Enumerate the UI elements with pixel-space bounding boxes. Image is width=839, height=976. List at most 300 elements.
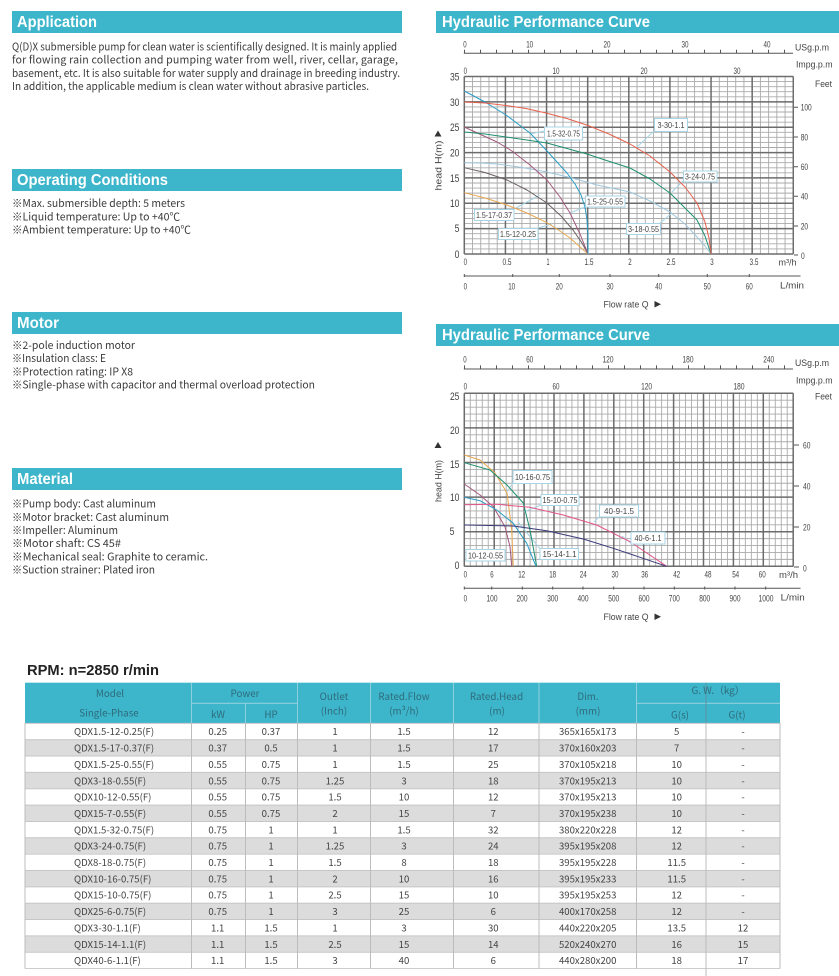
- table rows: 25: [488, 757, 499, 771]
- table rows: QDX10-12-0.55(F): [74, 790, 151, 804]
- panel: application: [12, 11, 402, 94]
- table rows: 15: [399, 937, 409, 951]
- table rows: QDX1.5-12-0.25(F): [74, 724, 154, 738]
- text block: application description: [12, 39, 400, 94]
- right axis: feet: 0: [801, 251, 805, 261]
- table rows: QDX15-10-0.75(F): [74, 888, 151, 902]
- table body stripes and lines: [25, 723, 780, 976]
- table rows: 0.5: [264, 741, 278, 755]
- text block: material list: [12, 497, 208, 578]
- x axis: m3/h: 3.5: [750, 257, 758, 267]
- heading: hydraulic performance curve 2: Hydraulic Performance Curve: [442, 327, 650, 344]
- table rows: 17: [488, 741, 499, 755]
- table rows: 13.5: [667, 920, 686, 934]
- table rows: 370x195x213: [559, 773, 616, 787]
- top axis: USg.p.m: 180: [682, 354, 694, 364]
- table rows: -: [741, 757, 745, 771]
- x axis: m3/h: 48: [704, 569, 712, 579]
- table rows: 2.5: [328, 937, 342, 951]
- leader lines: [514, 131, 683, 228]
- y axis: head in metres: 15: [450, 459, 459, 471]
- heading: material: [12, 468, 402, 490]
- curve labels: 1.5-25-0.55: [587, 196, 623, 206]
- table rows: 18: [488, 773, 499, 787]
- y axis: head in metres: [450, 72, 459, 261]
- table rows: 32: [488, 822, 499, 836]
- table rows: 370x195x213: [559, 790, 616, 804]
- curve labels: [466, 470, 665, 561]
- table rows: 8: [401, 855, 407, 869]
- right axis: feet: 80: [801, 132, 808, 142]
- x axis: L/min: L/min: [780, 280, 804, 290]
- x axis: m3/h: 1.5: [584, 257, 594, 267]
- curve: 1.5-17-0.37: [464, 168, 588, 254]
- curve: 40-6-1.1: [464, 525, 667, 566]
- table rows: 12: [671, 888, 682, 902]
- x axis: m3/h: m³/h: [778, 258, 796, 268]
- table rows: 1.1: [211, 937, 224, 951]
- text block: application description: Q(D)X submersible pump for clean water is scientifically designed. It is mainly applied: [12, 39, 397, 54]
- x axis: L/min: 400: [578, 594, 588, 604]
- heading: operating conditions: Operating Conditions: [17, 172, 168, 189]
- table header: (Inch): [321, 704, 347, 718]
- x axis: L/min: 20: [556, 281, 563, 291]
- table rows: 6: [491, 904, 496, 918]
- y axis: head in metres: [450, 391, 459, 572]
- x axis: m3/h: [464, 569, 798, 580]
- table rows: 0.75: [208, 855, 227, 869]
- curve: 15-10-0.75: [464, 497, 536, 566]
- table rows: 1.5: [397, 757, 411, 771]
- table rows: 3: [332, 953, 338, 967]
- table rows: 10: [488, 888, 499, 902]
- x axis: m3/h: 0: [464, 257, 467, 267]
- top axis: Impg.p.m labels: 0: [464, 66, 467, 76]
- table rows: QDX3-30-1.1(F): [74, 920, 141, 934]
- right axis: feet: 40: [801, 192, 808, 202]
- y axis: head in metres: 0: [455, 560, 459, 572]
- table rows: QDX1.5-17-0.37(F): [74, 741, 154, 755]
- y axis: head in metres: 25: [450, 122, 459, 134]
- curve: 10-16-0.75: [464, 455, 513, 566]
- table rows: 16: [671, 937, 682, 951]
- table rows: -: [741, 839, 745, 853]
- table rows: QDX25-6-0.75(F): [74, 904, 146, 918]
- top axis: USg.p.m: 240: [763, 354, 774, 364]
- top axis: USg.p.m: [463, 354, 793, 369]
- table rows: -: [741, 888, 745, 902]
- table rows: 1.5: [264, 953, 278, 967]
- table rows: 0.75: [208, 822, 227, 836]
- table rows: 1.5: [328, 855, 342, 869]
- top axis: Impg.p.m labels: [464, 381, 744, 391]
- table rows: QDX3-18-0.55(F): [74, 773, 146, 787]
- text block: application description: In addition, the applicable medium is clean water without abrasive particles.: [12, 79, 369, 94]
- top axis: USg.p.m: 0: [463, 39, 467, 49]
- table rows: 1: [268, 822, 274, 836]
- x axis: m3/h: 24: [580, 569, 587, 579]
- x axis: L/min: 200: [516, 594, 528, 604]
- table rows: 0.55: [208, 757, 227, 771]
- chart: performance curve 1: [434, 39, 833, 310]
- text block: material list: ※Motor shaft: CS 45#: [12, 536, 121, 551]
- unit labels: USg.p.m: [795, 42, 829, 52]
- x axis: L/min: [464, 586, 805, 604]
- table rows: 3: [401, 839, 407, 853]
- heading: hydraulic performance curve 1: Hydraulic Performance Curve: [442, 14, 650, 31]
- table rows: 11.5: [667, 855, 686, 869]
- x axis: L/min: 1000: [758, 594, 774, 604]
- y axis title: head H(m): [434, 141, 444, 190]
- top axis: USg.p.m: 60: [526, 354, 533, 364]
- right axis: feet: 20: [801, 221, 808, 231]
- table rows: -: [741, 904, 745, 918]
- x axis title: flow rate: Flow rate Q: [604, 612, 648, 622]
- table rows: QDX1.5-25-0.55(F): [74, 757, 154, 771]
- table rows: 10: [399, 790, 409, 804]
- table rows: 1: [332, 757, 338, 771]
- table rows: QDX15-14-1.1(F): [74, 937, 146, 951]
- top axis: Impg.p.m labels: [464, 66, 740, 76]
- top axis: Impg.p.m labels: 10: [552, 66, 560, 76]
- table rows: 395x195x233: [559, 871, 616, 885]
- text block: motor list: ※Insulation class: E: [12, 351, 106, 366]
- table rows: 0.55: [208, 790, 227, 804]
- table rows: 440x220x205: [559, 920, 616, 934]
- right axis: feet: [794, 102, 812, 261]
- table rows: 395x195x228: [559, 855, 616, 869]
- y axis: head in metres: 30: [450, 97, 459, 109]
- table rows: 365x165x173: [559, 724, 616, 738]
- unit labels: Feet: [815, 79, 832, 89]
- table rows: 1: [268, 855, 274, 869]
- right axis: feet: 20: [803, 522, 810, 532]
- unit labels: Feet: [815, 392, 832, 402]
- table rows: 10: [671, 773, 682, 787]
- table rows: 1.5: [397, 741, 411, 755]
- table rows: QDX40-6-1.1(F): [74, 953, 141, 967]
- unit labels: Impg.p.m: [796, 60, 833, 70]
- grid: [464, 76, 794, 255]
- text block: operating conditions list: ※Max. submersible depth: 5 meters: [12, 196, 185, 211]
- unit labels: [795, 42, 833, 89]
- text block: material list: ※Pump body: Cast aluminum: [12, 497, 156, 512]
- table rows: 30: [488, 920, 499, 934]
- table rows: 0.75: [208, 871, 227, 885]
- curve: 40-9-1.5: [464, 504, 667, 566]
- text block: motor list: ※Protection rating: IP X8: [12, 364, 133, 379]
- text block: motor list: [12, 338, 315, 393]
- table rows: 15: [399, 888, 409, 902]
- table rows: -: [741, 871, 745, 885]
- table rows: 520x240x270: [559, 937, 616, 951]
- table rows: 1.5: [397, 822, 411, 836]
- x axis: L/min: 0: [464, 281, 467, 291]
- x axis: L/min: 500: [608, 594, 619, 604]
- table header: Rated.Flow: [378, 689, 430, 703]
- table rows: -: [741, 741, 745, 755]
- table rows: 0.75: [262, 790, 280, 804]
- top axis: Impg.p.m labels: 180: [734, 381, 744, 391]
- y axis: head in metres: 25: [450, 391, 459, 403]
- table rows: 17: [738, 953, 748, 967]
- table: pump specifications: [25, 683, 780, 976]
- heading: material: Material: [17, 471, 73, 488]
- text block: operating conditions list: [12, 196, 191, 238]
- text block: material list: ※Suction strainer: Plated iron: [12, 563, 155, 578]
- top axis: USg.p.m: 30: [682, 39, 688, 49]
- text block: material list: ※Motor bracket: Cast aluminum: [12, 510, 169, 525]
- heading: motor: [12, 312, 402, 334]
- table rows: 1: [268, 871, 274, 885]
- right axis: feet: 40: [803, 481, 810, 491]
- table rows: 24: [488, 839, 499, 853]
- table rows: -: [741, 806, 745, 820]
- y axis: head in metres: 20: [450, 425, 459, 437]
- curve labels: 15-14-1.1: [542, 549, 577, 559]
- table rows: 1.5: [264, 920, 278, 934]
- x axis: L/min: 60: [746, 281, 753, 291]
- table header: Model: [96, 686, 124, 700]
- curve labels: 1.5-32-0.75: [547, 128, 580, 138]
- unit labels: [795, 358, 833, 402]
- table rows: 370x195x238: [559, 806, 616, 820]
- table rows: 12: [671, 904, 682, 918]
- x axis: L/min: 100: [486, 594, 498, 604]
- heading: hydraulic performance curve 1: [436, 11, 839, 33]
- table rows: 1.25: [326, 839, 344, 853]
- table rows: 370x105x218: [559, 757, 616, 771]
- table header: Dim.: [577, 689, 599, 703]
- table rows: 10: [671, 790, 682, 804]
- table rows: 1.5: [328, 790, 342, 804]
- table rows: 0.25: [208, 724, 227, 738]
- table rows: 10: [671, 806, 682, 820]
- text block: motor list: ※Single-phase with capacitor and thermal overload protection: [12, 378, 315, 393]
- table rows: 0.55: [208, 773, 227, 787]
- x axis: m3/h: 2.5: [666, 257, 676, 267]
- table rows: 15: [738, 937, 748, 951]
- x axis: m3/h: 54: [732, 569, 739, 579]
- x axis: m3/h: 6: [490, 569, 494, 579]
- heading: RPM: RPM: n=2850 r/min: [27, 663, 159, 679]
- table rows: 2: [332, 806, 338, 820]
- table header: (mm): [576, 704, 600, 718]
- table rows: 1: [332, 724, 338, 738]
- table rows: QDX1.5-32-0.75(F): [74, 822, 154, 836]
- top axis: Impg.p.m labels: 120: [641, 381, 652, 391]
- curve labels: 10-16-0.75: [515, 472, 550, 482]
- x axis: L/min: 900: [730, 594, 740, 604]
- x axis: L/min: 700: [669, 594, 680, 604]
- table rows: QDX3-24-0.75(F): [74, 839, 146, 853]
- table rows: 0.75: [262, 773, 280, 787]
- table header: G. W.（kg）: [691, 683, 745, 697]
- table rows: 15: [399, 806, 409, 820]
- table rows: 0.75: [262, 806, 280, 820]
- table rows: 6: [491, 953, 496, 967]
- top axis: USg.p.m: 120: [602, 354, 614, 364]
- table rows: 7: [491, 806, 496, 820]
- curve labels: 40-9-1.5: [604, 506, 634, 516]
- x axis: m3/h: 30: [612, 569, 618, 579]
- table rows: 2.5: [328, 888, 342, 902]
- x axis: L/min: 800: [699, 594, 710, 604]
- text block: operating conditions list: ※Ambient temperature: Up to +40℃: [12, 223, 191, 238]
- y axis: head in metres: 5: [455, 223, 459, 235]
- table header: (m³/h): [389, 704, 419, 718]
- grid: [464, 393, 794, 567]
- table rows: 1: [268, 888, 274, 902]
- curve labels: [474, 118, 717, 240]
- table rows: 440x280x200: [559, 953, 616, 967]
- x axis: L/min: [464, 274, 804, 291]
- curve: 15-14-1.1: [464, 463, 537, 566]
- y axis: head in metres: 5: [450, 526, 454, 538]
- x axis: m3/h: 60: [759, 569, 766, 579]
- table rows: 7: [674, 741, 679, 755]
- table rows: 1.1: [211, 953, 224, 967]
- top axis: USg.p.m: 0: [463, 354, 467, 364]
- table rows: 1: [332, 822, 338, 836]
- table rows: 40: [399, 953, 409, 967]
- curve labels: 1.5-17-0.37: [476, 210, 512, 220]
- x axis: m3/h: 42: [673, 569, 680, 579]
- table rows: 1.1: [211, 920, 224, 934]
- table rows: 12: [671, 839, 682, 853]
- curve labels: 15-10-0.75: [542, 495, 578, 505]
- right axis: feet: 60: [803, 440, 810, 450]
- y axis: head in metres: 15: [450, 173, 459, 185]
- y axis: head in metres: 10: [450, 492, 459, 504]
- table rows: 3: [332, 904, 338, 918]
- table rows: 5: [674, 724, 679, 738]
- x axis: L/min: 300: [547, 594, 558, 604]
- curve labels: 3-18-0.55: [628, 224, 659, 234]
- table header: Outlet: [320, 689, 349, 703]
- table header: Power: [231, 686, 260, 700]
- table rows: 0.75: [208, 904, 227, 918]
- curve labels: 1.5-12-0.25: [500, 229, 536, 239]
- table rows: 16: [488, 871, 499, 885]
- heading: application: [12, 11, 402, 33]
- table rows: 400x170x258: [559, 904, 616, 918]
- table header: G(t): [728, 708, 746, 722]
- curve labels: 40-6-1.1: [634, 533, 662, 543]
- heading: motor: Motor: [17, 315, 59, 332]
- table rows: 11.5: [667, 871, 686, 885]
- table rows: -: [741, 822, 745, 836]
- x axis: L/min: 10: [508, 281, 515, 291]
- table rows: 0.75: [262, 757, 280, 771]
- table header: Single-Phase: [79, 706, 139, 720]
- table rows: 12: [671, 822, 682, 836]
- table rows: -: [741, 724, 745, 738]
- top axis: USg.p.m: 40: [764, 39, 770, 49]
- table rows: QDX10-16-0.75(F): [74, 871, 151, 885]
- x axis: m3/h: 0.5: [502, 257, 512, 267]
- table rows: 395x195x253: [559, 888, 616, 902]
- table rows: 18: [488, 855, 499, 869]
- x axis: m3/h: 3: [710, 257, 714, 267]
- heading: application: Application: [17, 14, 97, 31]
- text block: motor list: ※2-pole induction motor: [12, 338, 136, 353]
- text block: material list: ※Mechanical seal: Graphite to ceramic.: [12, 549, 208, 564]
- text block: application description: for flowing rain collection and pumping water from well, river, cellar, garage,: [12, 53, 398, 68]
- unit labels: USg.p.m: [795, 358, 829, 368]
- curve labels: 10-12-0.55: [468, 550, 503, 560]
- table rows: 12: [488, 790, 499, 804]
- table rows: -: [741, 773, 745, 787]
- curve: 10-12-0.55: [464, 484, 512, 566]
- curve: 1.5-12-0.25: [464, 193, 588, 254]
- y axis: head in metres: 35: [450, 72, 459, 84]
- table rows: 18: [671, 953, 682, 967]
- table rows: 10: [671, 757, 682, 771]
- x axis: L/min: 0: [464, 594, 467, 604]
- x axis: L/min: L/min: [781, 592, 805, 602]
- table rows: [74, 724, 748, 967]
- table rows: 395x195x208: [559, 839, 616, 853]
- table rows: QDX15-7-0.55(F): [74, 806, 146, 820]
- table rows: 1.5: [397, 724, 411, 738]
- x axis: m3/h: [464, 257, 796, 268]
- curve: 3-24-0.75: [464, 132, 711, 254]
- table header: [25, 683, 780, 723]
- right axis: feet: [794, 440, 810, 573]
- table rows: 0.75: [208, 839, 227, 853]
- curve: 1.5-32-0.75: [464, 91, 588, 254]
- curve labels: 3-24-0.75: [685, 172, 715, 182]
- right axis: feet: 100: [801, 102, 812, 112]
- table rows: 0.37: [262, 724, 280, 738]
- table header: HP: [264, 707, 278, 721]
- curve: 1.5-25-0.55: [464, 127, 588, 254]
- x axis: m3/h: 12: [518, 569, 525, 579]
- heading: operating conditions: [12, 169, 402, 191]
- curve: 3-30-1.1: [464, 102, 711, 254]
- table rows: 3: [401, 773, 407, 787]
- top axis: USg.p.m: [463, 39, 793, 53]
- table rows: 380x220x228: [559, 822, 616, 836]
- table header: Rated.Head: [470, 689, 523, 703]
- top axis: Impg.p.m labels: 20: [640, 66, 648, 76]
- x axis: m3/h: 1: [546, 257, 550, 267]
- top axis: USg.p.m: 10: [526, 39, 533, 49]
- x axis: m3/h: m³/h: [779, 570, 798, 580]
- y axis title: head H(m): [434, 460, 444, 502]
- table rows: 3: [401, 920, 407, 934]
- top axis: Impg.p.m labels: 60: [552, 381, 560, 391]
- table rows: 25: [399, 904, 409, 918]
- text block: material list: ※Impeller: Aluminum: [12, 523, 118, 538]
- table rows: 12: [488, 724, 499, 738]
- x axis: L/min: 40: [655, 281, 662, 291]
- chart: performance curve 2: [434, 354, 833, 622]
- table header: kW: [211, 707, 225, 721]
- x axis: m3/h: 0: [464, 569, 467, 579]
- x axis: L/min: 30: [606, 281, 614, 291]
- table rows: 1.5: [264, 937, 278, 951]
- x axis: L/min: 50: [704, 281, 711, 291]
- x axis: m3/h: 36: [641, 569, 648, 579]
- table rows: 1: [268, 839, 274, 853]
- table header: G(s): [671, 708, 689, 722]
- table rows: 10: [399, 871, 409, 885]
- right axis: feet: 60: [801, 162, 808, 172]
- table rows: 0.55: [208, 806, 227, 820]
- heading: hydraulic performance curve 2: [436, 324, 839, 346]
